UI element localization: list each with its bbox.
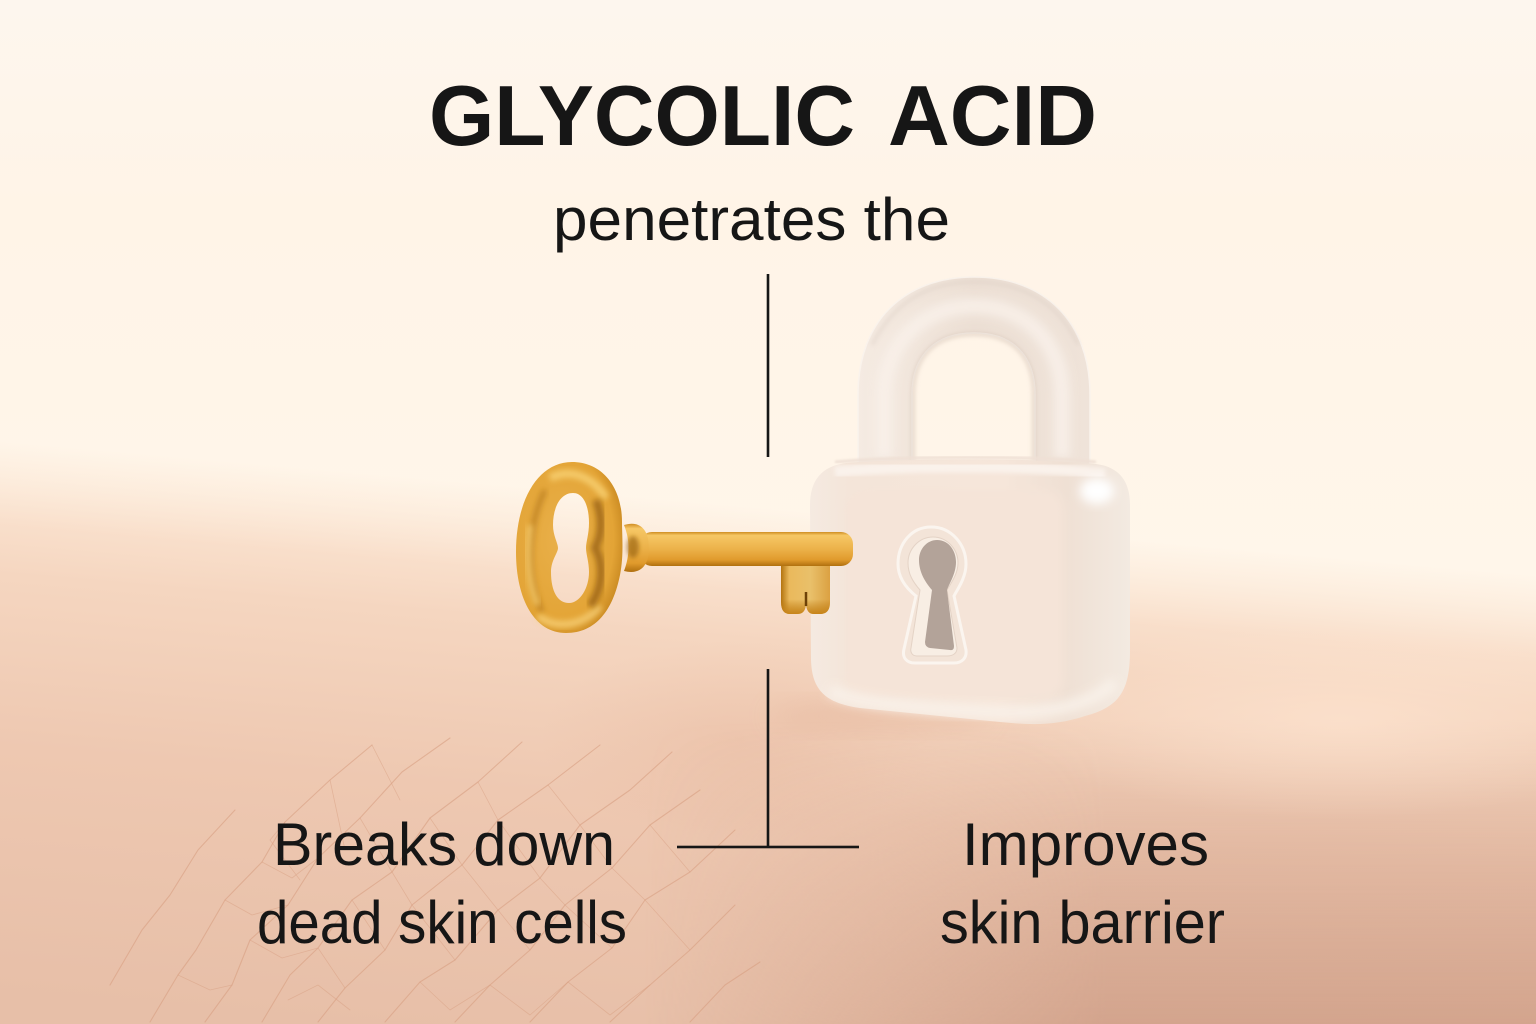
padlock (770, 277, 1130, 727)
key bow (516, 462, 622, 633)
title (429, 69, 1097, 164)
key stem (640, 532, 853, 566)
label: breaks down dead skin cells: Breaks down (273, 811, 615, 878)
connector: top line (767, 274, 769, 457)
key bit (781, 565, 830, 614)
label: improves skin barrier: skin barrier (940, 889, 1225, 956)
lock shadow (770, 705, 990, 727)
label: breaks down dead skin cells (257, 811, 627, 956)
title: ACID (888, 69, 1097, 164)
keyhole (898, 527, 966, 663)
key (516, 462, 853, 633)
skin texture: wrinkles (110, 738, 760, 1022)
label: breaks down dead skin cells: dead skin cells (257, 889, 627, 956)
bow shading (528, 474, 606, 624)
background: skin surface (0, 467, 1536, 1024)
key collar (624, 524, 649, 572)
lock body (810, 458, 1130, 724)
shackle (858, 277, 1090, 466)
label: improves skin barrier: Improves (962, 811, 1209, 878)
title: GLYCOLIC (429, 69, 855, 164)
connector: bottom branching line (677, 669, 859, 848)
label: improves skin barrier (940, 811, 1225, 956)
subtitle: penetrates the (553, 186, 950, 253)
